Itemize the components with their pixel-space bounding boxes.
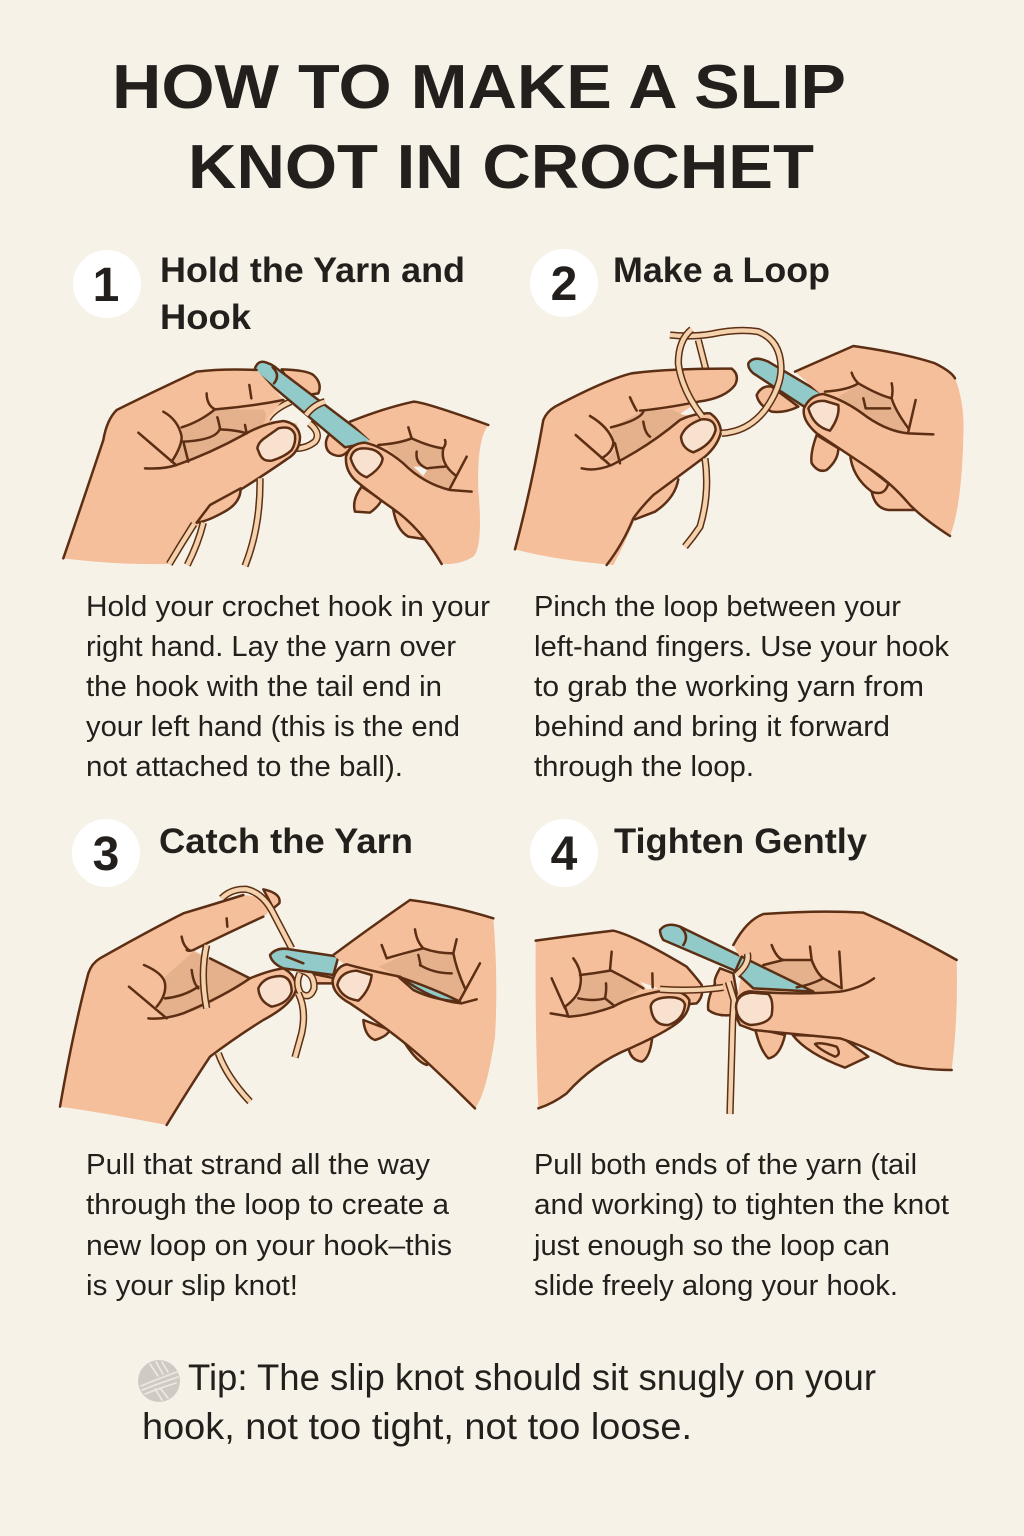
step 2 number badge: 2 bbox=[551, 258, 577, 311]
step 2 text: to grab the working yarn from bbox=[534, 671, 924, 703]
tip text bbox=[142, 1357, 876, 1447]
title: HOW TO MAKE A SLIP bbox=[112, 53, 846, 122]
tip text: Tip: The slip knot should sit snugly on your bbox=[188, 1357, 876, 1398]
callout: tip bbox=[138, 1357, 876, 1447]
step 4 text bbox=[533, 1149, 949, 1302]
step 3 text bbox=[86, 1149, 452, 1302]
step 4 heading: Tighten Gently bbox=[614, 822, 868, 861]
step 1 text: Hold your crochet hook in your bbox=[86, 591, 490, 623]
step 3 text: is your slip knot! bbox=[86, 1270, 298, 1302]
step 2 heading: Make a Loop bbox=[613, 251, 830, 290]
step 1 text: right hand. Lay the yarn over bbox=[86, 631, 456, 663]
step 2 text: Pinch the loop between your bbox=[534, 591, 901, 623]
step 4 text: slide freely along your hook. bbox=[534, 1270, 898, 1302]
illustration: catching the yarn bbox=[60, 889, 496, 1125]
step 1 text: the hook with the tail end in bbox=[86, 671, 442, 703]
step 4 number badge: 4 bbox=[551, 828, 578, 881]
step 1 number badge bbox=[73, 250, 141, 318]
step 1 heading: Hold the Yarn and bbox=[160, 251, 465, 290]
step 2 text: behind and bring it forward bbox=[534, 711, 890, 743]
panel: step 1 bbox=[63, 250, 490, 783]
step 4 text: just enough so the loop can bbox=[533, 1230, 890, 1262]
step 4 number badge bbox=[530, 819, 598, 887]
tip text: hook, not too tight, not too loose. bbox=[142, 1406, 692, 1447]
step 3 heading: Catch the Yarn bbox=[159, 822, 413, 861]
step 1 text bbox=[86, 591, 490, 783]
step 1 heading bbox=[160, 251, 465, 337]
panel: step 3 bbox=[60, 819, 496, 1302]
step 1 number badge: 1 bbox=[93, 259, 119, 312]
step 2 number badge bbox=[530, 249, 598, 317]
illustration: making a loop bbox=[515, 329, 964, 565]
illustration: hands holding yarn and hook bbox=[63, 362, 488, 566]
step 3 number badge bbox=[72, 819, 140, 887]
step 2 text: left-hand fingers. Use your hook bbox=[534, 631, 949, 663]
step 3 text: through the loop to create a bbox=[86, 1189, 450, 1221]
step 1 text: not attached to the ball). bbox=[86, 751, 403, 783]
step 4 text: Pull both ends of the yarn (tail bbox=[534, 1149, 917, 1181]
icon: yarn ball bbox=[138, 1360, 180, 1402]
step 2 text: through the loop. bbox=[534, 751, 754, 783]
step 1 heading: Hook bbox=[160, 298, 252, 337]
title: KNOT IN CROCHET bbox=[188, 133, 814, 202]
step 2 text bbox=[534, 591, 949, 783]
panel: step 4 bbox=[530, 819, 957, 1302]
step 3 text: Pull that strand all the way bbox=[86, 1149, 431, 1181]
illustration: tightening the knot bbox=[536, 912, 957, 1114]
step 4 text: and working) to tighten the knot bbox=[534, 1189, 949, 1221]
step 3 text: new loop on your hook–this bbox=[86, 1230, 452, 1262]
panel: step 2 bbox=[515, 249, 964, 783]
step 1 text: your left hand (this is the end bbox=[86, 711, 460, 743]
step 3 number badge: 3 bbox=[93, 828, 119, 881]
title bbox=[112, 53, 846, 202]
